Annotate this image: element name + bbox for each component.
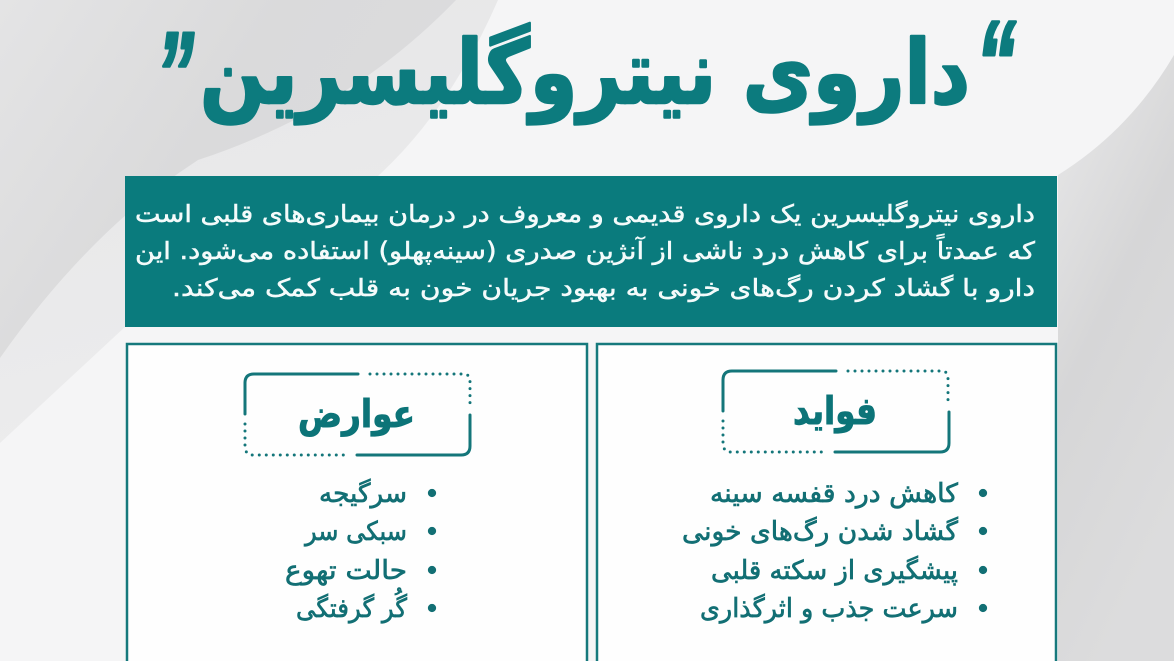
list: side effects: گُر گرفتگی [296,587,408,624]
title [156,0,1016,140]
list: benefits: کاهش درد قفسه سینه [710,479,959,509]
text block: introduction paragraph [135,200,1036,302]
panel: introduction [125,176,1057,327]
opening quote: “ [976,0,1016,129]
heading frame: side effects [245,374,470,455]
text block: introduction paragraph: دارو با گشاد کردن رگ‌های خونی به بهبود جریان خون به قلب کمک می‌کند. [172,274,1035,302]
heading: side effects: عوارض [298,392,415,436]
closing quote: ” [156,8,194,140]
list: benefits: سرعت جذب و اثرگذاری [700,593,958,624]
heading: benefits: فواید [793,389,877,433]
list: benefits [682,479,987,624]
title: داروی نیتروگلیسرین [200,21,970,125]
text block: introduction paragraph: که عمدتاً برای کاهش درد ناشی از آنژین صدری (سینه‌پهلو) استفاده می‌شود. این [135,234,1036,265]
list: side effects: حالت تهوع [285,556,407,586]
list: side effects: سبکی سر [303,517,407,547]
list: side effects [285,478,436,624]
text block: introduction paragraph: داروی نیتروگلیسرین یک داروی قدیمی و معروف در درمان بیماری‌های قلبی است [135,200,1035,228]
list: benefits: پیشگیری از سکته قلبی [711,555,958,586]
panel: benefits [597,344,1056,661]
list: benefits: گشاد شدن رگ‌های خونی [682,516,959,547]
list: side effects: سرگیجه [319,478,407,509]
panel: side effects [127,344,587,661]
heading frame: benefits [723,371,949,452]
